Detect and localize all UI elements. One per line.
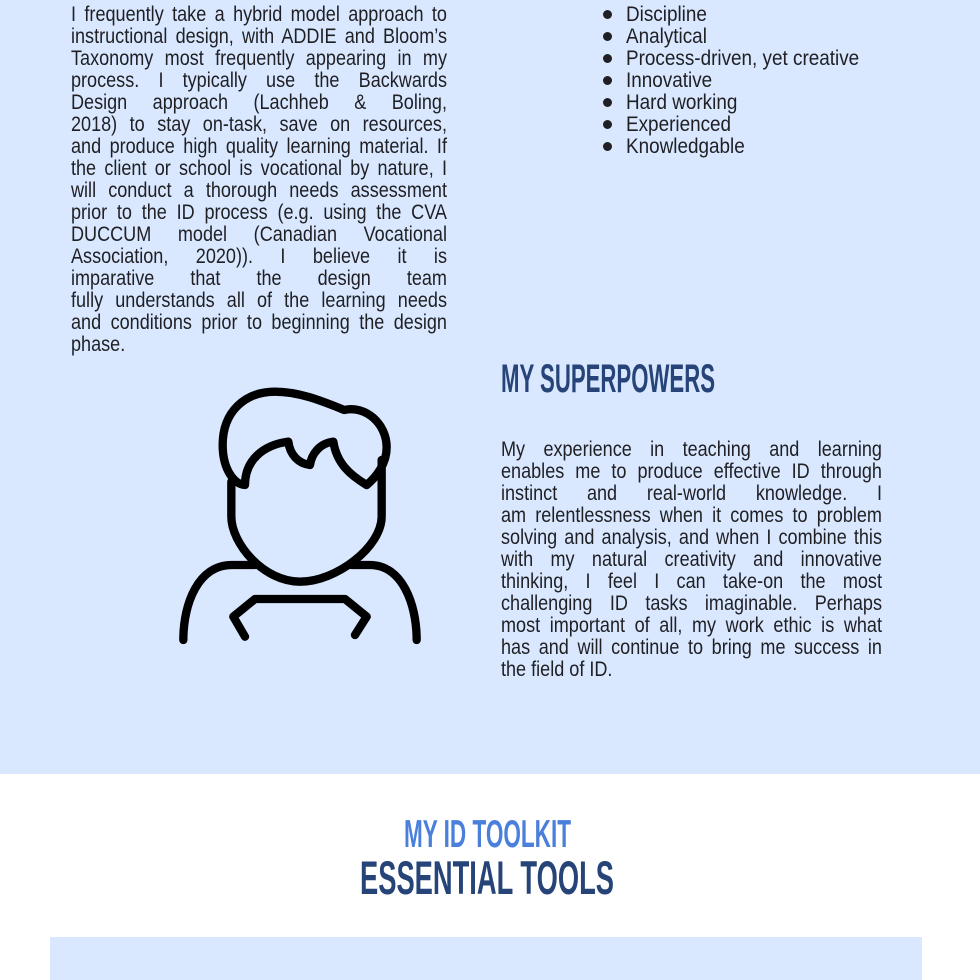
- text block: superpowers description: challenging ID tasks imaginable. Perhaps: [501, 592, 882, 615]
- text block: instructional design approach: and conditions prior to beginning the design: [71, 311, 447, 334]
- text block: instructional design approach: Design approach (Lachheb & Boling,: [71, 91, 447, 114]
- heading: essential tools: ESSENTIAL TOOLS: [360, 851, 614, 904]
- panel: light blue section: [0, 0, 980, 774]
- text block: superpowers description: has and will continue to bring me success in: [501, 636, 882, 659]
- list: personal traits: Discipline: [626, 3, 707, 26]
- text block: instructional design approach: Association, 2020)). I believe it is: [71, 245, 447, 268]
- text block: instructional design approach: fully understands all of the learning needs: [71, 289, 447, 312]
- text block: instructional design approach: and produce high quality learning material. If: [71, 135, 447, 158]
- list: personal traits: Hard working: [626, 91, 737, 114]
- text block: superpowers description: [501, 438, 882, 681]
- text block: instructional design approach: imparative that the design team: [71, 267, 447, 290]
- text block: instructional design approach: will conduct a thorough needs assessment: [71, 179, 447, 202]
- text block: superpowers description: am relentlessness when it comes to problem: [501, 504, 882, 527]
- text block: instructional design approach: 2018) to stay on-task, save on resources,: [71, 113, 447, 136]
- list: personal traits: Experienced: [626, 113, 731, 136]
- list: personal traits: Knowledgable: [626, 135, 745, 158]
- text block: superpowers description: My experience in teaching and learning: [501, 438, 882, 461]
- heading: my id toolkit: MY ID TOOLKIT: [404, 813, 571, 856]
- text block: instructional design approach: prior to the ID process (e.g. using the CVA: [71, 201, 447, 224]
- text block: superpowers description: solving and analysis, and when I combine this: [501, 526, 882, 549]
- list: personal traits: Process-driven, yet creative: [626, 47, 859, 70]
- text block: superpowers description: the field of ID.: [501, 658, 612, 681]
- text block: superpowers description: most important of all, my work ethic is what: [501, 614, 882, 637]
- text block: instructional design approach: the client or school is vocational by nature, I: [71, 157, 447, 180]
- panel: essential tools container: [50, 937, 922, 980]
- text block: instructional design approach: [71, 3, 448, 356]
- text block: superpowers description: instinct and real-world knowledge. I: [501, 482, 882, 505]
- list: personal traits: [603, 3, 859, 158]
- text block: superpowers description: with my natural creativity and innovative: [501, 548, 882, 571]
- text block: instructional design approach: Taxonomy most frequently appearing in my: [71, 47, 447, 70]
- text block: instructional design approach: I frequently take a hybrid model approach to: [71, 3, 447, 26]
- text block: instructional design approach: DUCCUM model (Canadian Vocational: [71, 223, 447, 246]
- text block: instructional design approach: process. I typically use the Backwards: [71, 69, 447, 92]
- list: personal traits: Innovative: [626, 69, 712, 92]
- text block: superpowers description: thinking, I feel I can take-on the most: [501, 570, 882, 593]
- text block: superpowers description: enables me to produce effective ID through: [501, 460, 882, 483]
- heading: my superpowers: MY SUPERPOWERS: [501, 357, 715, 401]
- text block: instructional design approach: instructional design, with ADDIE and Bloom’s: [71, 25, 447, 48]
- text block: instructional design approach: phase.: [71, 333, 125, 356]
- list: personal traits: Analytical: [626, 25, 707, 48]
